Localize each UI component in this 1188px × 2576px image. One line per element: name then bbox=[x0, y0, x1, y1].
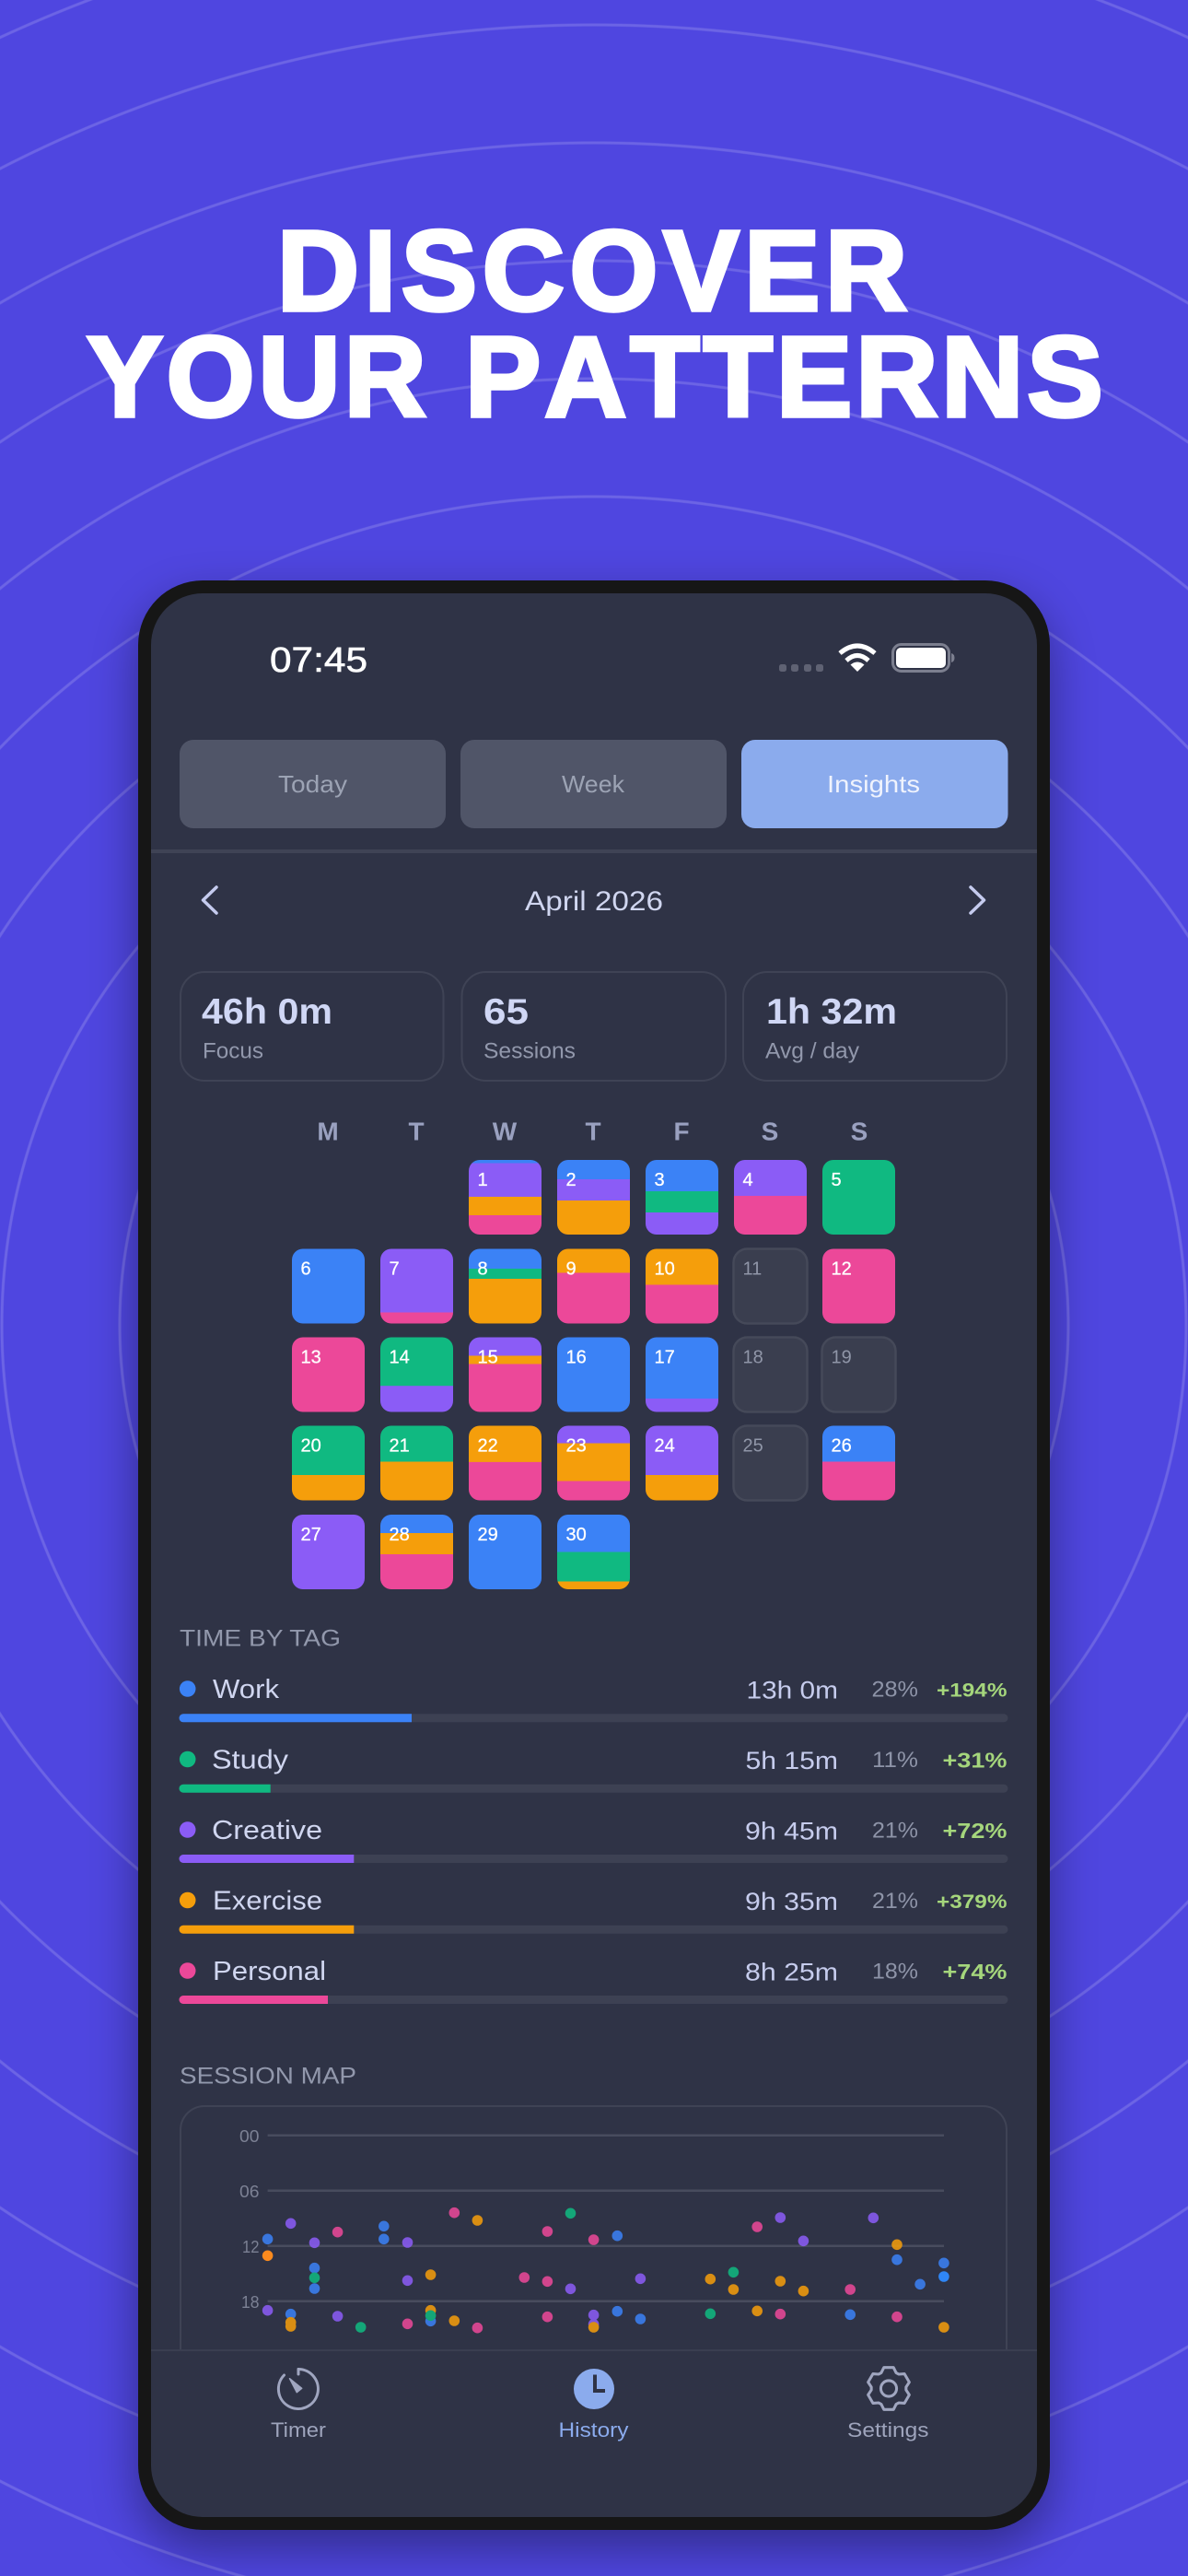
day 9 bbox=[557, 1249, 630, 1323]
day 29 bbox=[469, 1515, 542, 1589]
day 3 bbox=[646, 1160, 718, 1235]
hour axis labels: 00 bbox=[239, 2127, 260, 2146]
icon: gear bbox=[868, 2368, 909, 2409]
month label: April 2026 bbox=[525, 886, 663, 917]
weekday header: F bbox=[673, 1117, 690, 1146]
nav: settings bbox=[847, 2368, 928, 2441]
icon: timer bbox=[278, 2370, 318, 2408]
hour axis labels: 18 bbox=[241, 2293, 260, 2312]
heading: session map: SESSION MAP bbox=[180, 2064, 356, 2090]
tag row: work: 28% bbox=[871, 1678, 918, 1703]
hour axis labels: 12 bbox=[242, 2238, 260, 2256]
day 15: 15 bbox=[477, 1347, 498, 1367]
tag row: exercise: 9h 35m bbox=[745, 1888, 838, 1915]
day 19 empty bbox=[821, 1338, 895, 1411]
tab: week bbox=[460, 740, 727, 828]
weekday header: S bbox=[762, 1117, 778, 1146]
day 14: 14 bbox=[389, 1347, 410, 1367]
day 2: 2 bbox=[565, 1170, 577, 1190]
day 26 bbox=[822, 1426, 895, 1500]
tag row: work: +194% bbox=[937, 1680, 1007, 1701]
day 1: 1 bbox=[477, 1170, 488, 1190]
stat card: average per day bbox=[743, 972, 1007, 1081]
day 2 bbox=[557, 1160, 630, 1235]
tab bar bbox=[180, 740, 1007, 828]
tag row: personal bbox=[179, 1957, 1007, 2004]
status time: 07:45 bbox=[270, 641, 367, 680]
icon: battery bbox=[893, 645, 954, 671]
day 28: 28 bbox=[389, 1525, 410, 1545]
tag row: creative: 9h 45m bbox=[745, 1817, 838, 1844]
day 11 empty bbox=[733, 1249, 807, 1323]
day 27 bbox=[292, 1515, 365, 1589]
tab: today bbox=[180, 740, 446, 828]
calendar heatmap bbox=[292, 1160, 895, 1589]
title: DISCOVER bbox=[277, 208, 907, 335]
weekday header: S bbox=[851, 1117, 868, 1146]
stat card: sessions: Sessions bbox=[483, 1039, 576, 1063]
day 23 bbox=[557, 1426, 630, 1500]
tag row: creative bbox=[179, 1816, 1007, 1863]
day 21: 21 bbox=[389, 1435, 410, 1456]
tag row: creative: +72% bbox=[943, 1819, 1007, 1843]
day 25 empty bbox=[733, 1426, 807, 1500]
tab: today: Today bbox=[278, 770, 347, 798]
day 8 bbox=[469, 1249, 542, 1323]
day 10: 10 bbox=[654, 1259, 675, 1279]
day 4: 4 bbox=[742, 1170, 753, 1190]
icon: clock bbox=[574, 2369, 614, 2409]
tag row: personal: 8h 25m bbox=[745, 1959, 838, 1986]
day 23: 23 bbox=[565, 1435, 587, 1456]
day 7 bbox=[380, 1249, 453, 1323]
day 9: 9 bbox=[565, 1259, 577, 1279]
tab: insights: Insights bbox=[827, 770, 920, 798]
tag row: personal: +74% bbox=[943, 1960, 1007, 1984]
month navigator bbox=[203, 886, 984, 917]
day 25 empty: 25 bbox=[742, 1435, 763, 1456]
day 22: 22 bbox=[477, 1435, 498, 1456]
stat card: average per day: 1h 32m bbox=[766, 992, 897, 1032]
tag row: study: 11% bbox=[872, 1748, 918, 1773]
title: YOUR PATTERNS bbox=[87, 315, 1103, 440]
tag row: exercise: Exercise bbox=[213, 1887, 322, 1916]
day 5 bbox=[822, 1160, 895, 1235]
day 13 bbox=[292, 1338, 365, 1411]
day 10 bbox=[646, 1249, 718, 1323]
day 20: 20 bbox=[300, 1435, 321, 1456]
hour axis labels bbox=[239, 2127, 260, 2312]
weekday header: T bbox=[585, 1117, 601, 1146]
day 26: 26 bbox=[831, 1435, 852, 1456]
day 12: 12 bbox=[831, 1259, 852, 1279]
day 24: 24 bbox=[654, 1435, 675, 1456]
grid lines bbox=[268, 2136, 944, 2301]
day 1 bbox=[469, 1160, 542, 1235]
phone screen bbox=[151, 593, 1037, 2517]
day 16 bbox=[557, 1338, 630, 1411]
tag row: exercise: +379% bbox=[937, 1891, 1007, 1913]
day 6: 6 bbox=[300, 1259, 311, 1279]
stat card: sessions: 65 bbox=[483, 992, 529, 1032]
nav: timer: Timer bbox=[271, 2418, 326, 2441]
day 4 bbox=[734, 1160, 807, 1235]
phone frame bbox=[138, 580, 1050, 2530]
day 13: 13 bbox=[300, 1347, 321, 1367]
day 15 bbox=[469, 1338, 542, 1411]
day 21 bbox=[380, 1426, 453, 1500]
day 11 empty: 11 bbox=[742, 1259, 762, 1279]
icon: wifi bbox=[840, 646, 875, 672]
status bar bbox=[270, 641, 954, 680]
day 16: 16 bbox=[565, 1347, 587, 1367]
tag row: work: Work bbox=[213, 1675, 280, 1704]
day 27: 27 bbox=[300, 1525, 321, 1545]
day 5: 5 bbox=[831, 1170, 842, 1190]
panel: session map bbox=[181, 2106, 1007, 2350]
nav: settings: Settings bbox=[847, 2418, 928, 2441]
day 30 bbox=[557, 1515, 630, 1589]
hour axis labels: 06 bbox=[239, 2183, 260, 2201]
weekday header: T bbox=[408, 1117, 425, 1146]
day 28 bbox=[380, 1515, 453, 1589]
nav: history bbox=[558, 2369, 628, 2441]
tag row: work: 13h 0m bbox=[746, 1677, 838, 1704]
day 30: 30 bbox=[565, 1525, 587, 1545]
tag row: creative: Creative bbox=[212, 1816, 322, 1845]
tag row: personal: 18% bbox=[872, 1960, 918, 1985]
day 22 bbox=[469, 1426, 542, 1500]
day 19 empty: 19 bbox=[831, 1347, 852, 1367]
bottom navigation bbox=[271, 2368, 928, 2441]
day 29: 29 bbox=[477, 1525, 498, 1545]
stat card: average per day: Avg / day bbox=[765, 1039, 859, 1063]
tag row: study: +31% bbox=[943, 1749, 1007, 1773]
tab: week: Week bbox=[562, 770, 625, 798]
day 17: 17 bbox=[654, 1347, 675, 1367]
session dots bbox=[262, 2207, 949, 2333]
tag row: study: Study bbox=[212, 1745, 289, 1774]
tag row: exercise: 21% bbox=[872, 1889, 918, 1914]
tag row: exercise bbox=[179, 1887, 1007, 1934]
weekday header bbox=[317, 1117, 868, 1146]
day 8: 8 bbox=[477, 1259, 488, 1279]
stat card: sessions bbox=[462, 972, 726, 1081]
day 24 bbox=[646, 1426, 718, 1500]
stat card: focus: 46h 0m bbox=[202, 992, 332, 1032]
weekday header: M bbox=[317, 1117, 339, 1146]
tag row: creative: 21% bbox=[872, 1819, 918, 1844]
icon: previous chevron bbox=[203, 887, 216, 913]
weekday header: W bbox=[493, 1117, 518, 1146]
day 20 bbox=[292, 1426, 365, 1500]
tag row: study bbox=[179, 1745, 1007, 1793]
tag row: personal: Personal bbox=[213, 1957, 326, 1986]
nav: timer bbox=[271, 2370, 326, 2441]
day 18 empty bbox=[733, 1338, 807, 1411]
title bbox=[87, 208, 1103, 440]
day 14 bbox=[380, 1338, 453, 1411]
nav: history: History bbox=[558, 2418, 628, 2441]
stat card: focus: Focus bbox=[203, 1039, 263, 1063]
heading: time by tag: TIME BY TAG bbox=[180, 1626, 341, 1652]
day 18 empty: 18 bbox=[742, 1347, 763, 1367]
day 12 bbox=[822, 1249, 895, 1323]
day 3: 3 bbox=[654, 1170, 665, 1190]
tab: insights bbox=[741, 740, 1007, 828]
icon: next chevron bbox=[971, 887, 984, 913]
tag row: work bbox=[179, 1675, 1007, 1722]
stat card: focus bbox=[181, 972, 444, 1081]
icon: signal dots bbox=[779, 664, 823, 672]
day 7: 7 bbox=[389, 1259, 400, 1279]
day 17 bbox=[646, 1338, 718, 1411]
tag row: study: 5h 15m bbox=[746, 1747, 838, 1774]
day 6 bbox=[292, 1249, 365, 1323]
